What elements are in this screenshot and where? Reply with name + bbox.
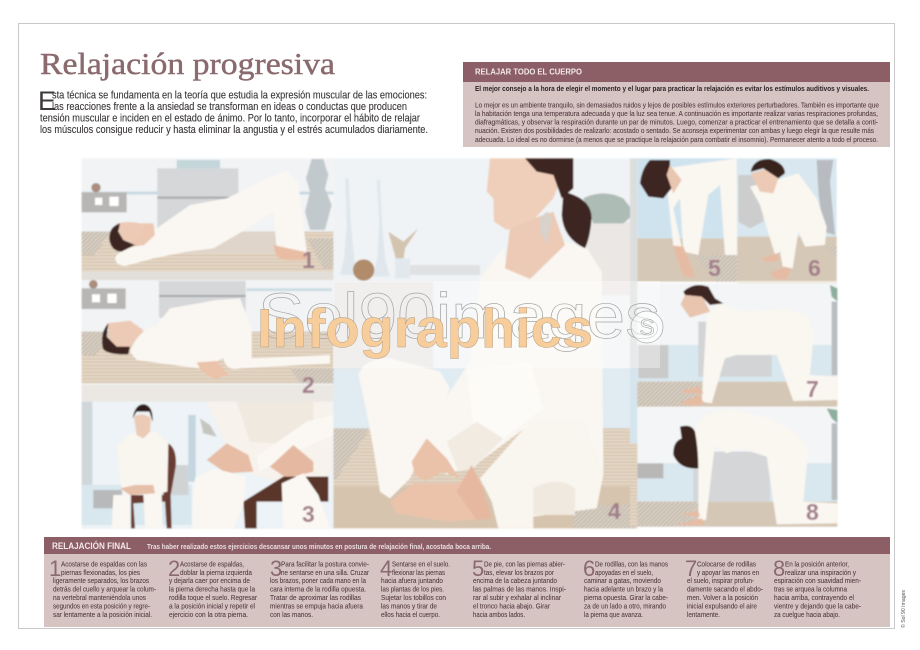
step 4 bbox=[380, 556, 450, 619]
step 8: 8 bbox=[773, 556, 785, 581]
step 2: ejercicio con la otra pierna. bbox=[169, 610, 248, 619]
step 5: tas, elevar los brazos por bbox=[484, 568, 554, 577]
intro paragraph bbox=[38, 86, 428, 136]
step 7: damente sacando el abdo- bbox=[687, 584, 763, 594]
step 2: y dejarla caer por encima de bbox=[169, 576, 250, 585]
step 7: 7 bbox=[685, 556, 697, 581]
step 3: Para facilitar la postura convie- bbox=[281, 560, 369, 568]
step 5: encima de la cabeza juntando bbox=[473, 576, 557, 585]
panel: relajar todo el cuerpo bbox=[463, 62, 890, 147]
intro paragraph: E bbox=[38, 86, 56, 116]
step 1 bbox=[49, 556, 156, 619]
exercise numbers on photos bbox=[302, 247, 821, 527]
step 6: pierna opuesta. Girar la cabe- bbox=[584, 593, 668, 602]
step 6: za de un lado a otro, mirando bbox=[584, 602, 666, 610]
step 3: Tratar de aproximar las rodillas bbox=[270, 593, 361, 602]
step 1: piernas flexionadas, los pies bbox=[61, 568, 140, 577]
step 1: ligeramente separados, los brazos bbox=[53, 576, 149, 585]
step 2: Acostarse de espaldas, bbox=[180, 560, 244, 568]
step 4: 4 bbox=[380, 556, 392, 581]
step 1: Acostarse de espaldas con las bbox=[61, 560, 147, 568]
step 5: 5 bbox=[472, 556, 484, 581]
panel: relajar todo el cuerpo: diafragmáticas, y observar la respiración durante un par de minutos. Luego, comenzar a practicar el entrenamiento que se detalla a conti- bbox=[475, 118, 878, 126]
step 4: Sujetar los tobillos con bbox=[381, 593, 446, 602]
subheading: Tras haber realizado estos ejercicios descansar unos minutos en postura de relajación final, acostada boca arriba. bbox=[147, 542, 491, 551]
step 8: vientre y dejando que la cabe- bbox=[774, 602, 861, 610]
heading: RELAJACIÓN FINAL bbox=[52, 540, 132, 551]
step 6: De rodillas, con las manos bbox=[595, 560, 668, 568]
step 2 bbox=[168, 556, 257, 619]
step 8 bbox=[773, 556, 861, 619]
photo 5: standing forward bend bbox=[630, 158, 737, 527]
step 3 bbox=[270, 556, 369, 619]
step 2: 2 bbox=[168, 556, 180, 581]
photo 8: cat pose bbox=[630, 408, 837, 527]
watermark: S bbox=[639, 314, 655, 340]
panel: relajar todo el cuerpo: RELAJAR TODO EL CUERPO bbox=[475, 66, 582, 76]
step 4: flexionar las piernas bbox=[392, 568, 445, 577]
exercise numbers on photos: 6 bbox=[808, 255, 821, 281]
intro paragraph: sta técnica se fundamenta en la teoría que estudia la expresión muscular de las emociones: bbox=[52, 90, 427, 102]
intro paragraph: tensión muscular e inciden en el estado de ánimo. Por lo tanto, incorporar el hábito de relajar bbox=[40, 112, 420, 124]
watermark: Infographics bbox=[257, 297, 593, 359]
intro paragraph: los músculos consigue reducir y hasta eliminar la angustia y el estrés acumulados diariamente. bbox=[40, 124, 428, 136]
step 5: el tronco hacia abajo. Girar bbox=[473, 602, 550, 610]
step 2: rodilla toque el suelo. Regresar bbox=[169, 593, 257, 602]
step 7: y apoyar las manos en bbox=[697, 568, 759, 577]
step 4: Sentarse en el suelo. bbox=[392, 560, 450, 568]
step 7: el suelo, inspirar profun- bbox=[687, 576, 754, 585]
step 2: a la posición inicial y repetir el bbox=[169, 602, 255, 610]
step 3: los brazos, poner cada mano en la bbox=[270, 576, 367, 585]
step 5: rar al subir y exhalar al inclinar bbox=[473, 593, 561, 602]
photo collage bbox=[82, 158, 837, 529]
step 8: hacia arriba, contrayendo el bbox=[774, 593, 854, 602]
exercise numbers on photos: 1 bbox=[302, 247, 315, 273]
step 5: las palmas de las manos. Inspi- bbox=[473, 584, 566, 594]
step 3: 3 bbox=[270, 556, 282, 581]
step 1: na vertebral manteniéndola unos bbox=[53, 593, 146, 602]
step 5: De pie, con las piernas abier- bbox=[484, 560, 565, 568]
step 3: con las manos. bbox=[270, 610, 313, 619]
photo 6: on all fours walking bbox=[737, 158, 837, 284]
step 8: za cuelgue hacia abajo. bbox=[774, 610, 840, 619]
step 8: En la posición anterior, bbox=[785, 560, 849, 568]
step 7: inicial expulsando el aire bbox=[687, 602, 757, 610]
photo 1: bridge pose bbox=[82, 158, 333, 280]
watermark: Sol90images bbox=[258, 280, 660, 352]
step 1: sar lentamente a la posición inicial. bbox=[53, 610, 152, 619]
step 2: la pierna derecha hasta que la bbox=[169, 584, 256, 594]
step 6: hacia adelante un brazo y la bbox=[584, 584, 664, 594]
exercise numbers on photos: 5 bbox=[708, 255, 721, 281]
step 6: apoyadas en el suelo, bbox=[595, 568, 653, 577]
step 2: doblar la pierna izquierda bbox=[180, 568, 253, 577]
step 6: caminar a gatas, moviendo bbox=[584, 576, 661, 585]
step 3: mientras se empuja hacia afuera bbox=[270, 602, 364, 610]
step 3: ne sentarse en una silla. Cruzar bbox=[281, 568, 369, 577]
step 1: detrás del cuello y arquear la colum- bbox=[53, 584, 156, 594]
step 7: lentamente. bbox=[687, 610, 720, 619]
step 8: espiración con suavidad mien- bbox=[774, 576, 861, 585]
step 4: las plantas de los pies. bbox=[381, 584, 444, 594]
photo 3: seated on chair bbox=[82, 402, 333, 529]
exercise numbers on photos: 3 bbox=[302, 501, 315, 527]
step 3: cara interna de la rodilla opuesta. bbox=[270, 584, 366, 594]
exercise numbers on photos: 7 bbox=[806, 376, 819, 402]
step 5: hacia ambos lados. bbox=[473, 610, 525, 619]
step 7 bbox=[685, 556, 763, 619]
photo 7: table pose bbox=[637, 283, 837, 407]
photo 4: seated woman bbox=[333, 158, 637, 528]
step 1: segundos en esta posición y regre- bbox=[53, 602, 150, 610]
exercise numbers on photos: 4 bbox=[608, 498, 621, 524]
step 8: tras se arquea la columna bbox=[774, 584, 848, 594]
step 7: Colocarse de rodillas bbox=[697, 560, 756, 568]
step 5 bbox=[472, 556, 566, 619]
exercise numbers on photos: 2 bbox=[302, 372, 315, 398]
exercise numbers on photos: 8 bbox=[806, 499, 819, 525]
intro paragraph: las reacciones frente a la ansiedad se transforman en ideas o conductas que producen bbox=[52, 101, 407, 113]
step 6: 6 bbox=[583, 556, 595, 581]
step 4: ellos hacia el cuerpo. bbox=[381, 610, 440, 619]
step 6: la pierna que avanza. bbox=[584, 610, 643, 619]
step 4: las manos y tirar de bbox=[381, 602, 437, 610]
credit: © Sol 90 Images bbox=[900, 589, 907, 628]
step 7: men. Volver a la posición bbox=[687, 593, 758, 602]
step 6 bbox=[583, 556, 668, 619]
step 8: realizar una inspiración y bbox=[785, 568, 856, 577]
photo 2: knee drop pose bbox=[82, 280, 333, 402]
step 1: 1 bbox=[49, 556, 61, 581]
title: Relajación progresiva bbox=[40, 46, 335, 81]
step 4: hacia afuera juntando bbox=[381, 576, 443, 585]
panel: relajación final bbox=[44, 537, 890, 627]
